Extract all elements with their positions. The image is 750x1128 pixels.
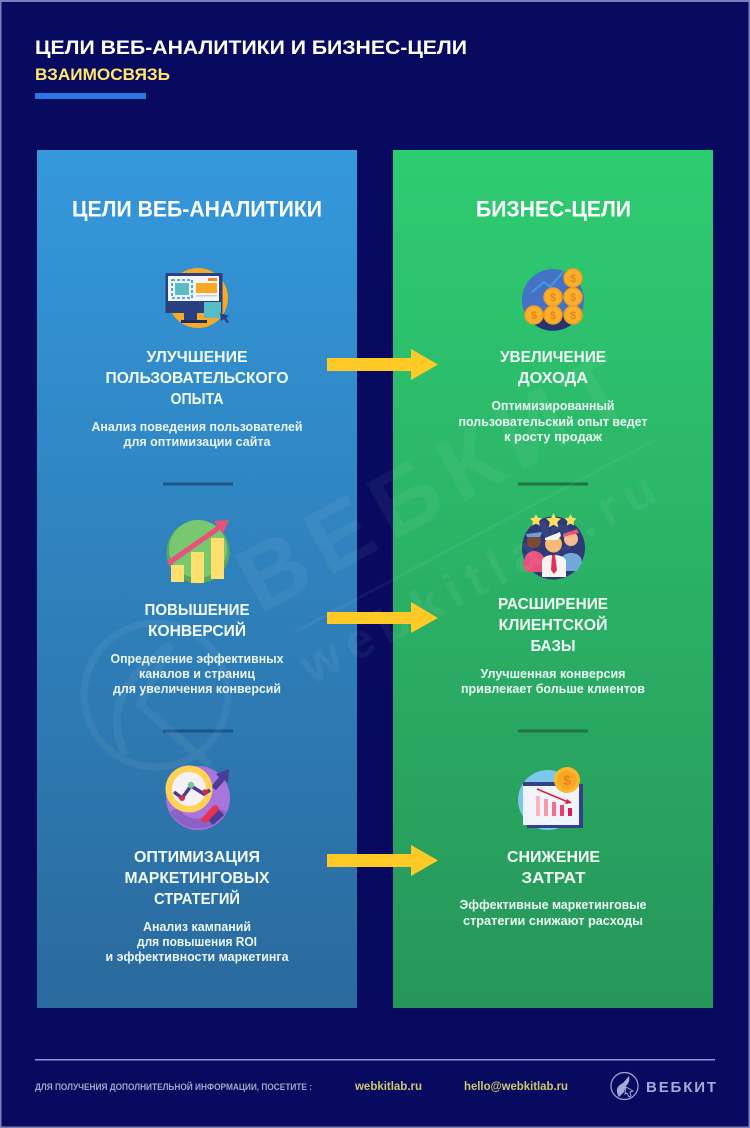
footer divider: [35, 1059, 715, 1060]
item description: customer base: привлекает больше клиентов: [461, 682, 645, 696]
heading: business goals: БИЗНЕС-ЦЕЛИ: [476, 196, 631, 222]
item description: cost reduction: стратегии снижают расходы: [463, 914, 643, 928]
item heading: revenue: ДОХОДА: [518, 370, 588, 387]
item description: revenue: [458, 399, 648, 444]
item description: marketing strategies: для повышения ROI: [137, 935, 257, 949]
item heading: user experience: УЛУЧШЕНИЕ: [146, 349, 248, 366]
item description: user experience: [92, 420, 302, 449]
icon: coins: $: [570, 273, 576, 285]
heading: web analytics goals: ЦЕЛИ ВЕБ-АНАЛИТИКИ: [72, 196, 322, 222]
item heading: conversions: КОНВЕРСИЙ: [148, 621, 246, 640]
item heading: customer base: БАЗЫ: [530, 638, 576, 655]
item description: marketing strategies: и эффективности маркетинга: [106, 950, 290, 964]
icon: coins: $: [550, 310, 556, 322]
icon: coins: $: [570, 292, 576, 304]
item heading: marketing strategies: МАРКЕТИНГОВЫХ: [124, 870, 270, 887]
watermark: ВЕБКИТ: [220, 335, 646, 632]
watermark: [84, 335, 665, 767]
icon: growth chart: [166, 520, 230, 584]
item description: conversions: каналов и страниц: [139, 667, 255, 681]
item description: revenue: Оптимизированный: [492, 399, 614, 413]
icon: coins: $: [550, 292, 556, 304]
panel: web analytics goals: [37, 150, 357, 1008]
item heading: user experience: ОПЫТА: [170, 391, 224, 408]
item heading: customer base: КЛИЕНТСКОЙ: [498, 615, 608, 634]
item description: conversions: для увеличения конверсий: [113, 682, 281, 696]
item description: revenue: к росту продаж: [504, 430, 602, 444]
footer note: ДЛЯ ПОЛУЧЕНИЯ ДОПОЛНИТЕЛЬНОЙ ИНФОРМАЦИИ, ПОСЕТИТЕ :: [35, 1081, 312, 1092]
item heading: marketing strategies: [124, 849, 270, 908]
panel: business goals: [393, 150, 713, 1008]
footer website: webkitlab.ru: [354, 1081, 422, 1093]
arrow: user experience to revenue: [327, 349, 438, 380]
icon: coins: [522, 269, 584, 331]
item heading: customer base: РАСШИРЕНИЕ: [498, 596, 608, 613]
item description: revenue: пользовательский опыт ведет: [458, 415, 648, 429]
item heading: conversions: ПОВЫШЕНИЕ: [144, 602, 250, 619]
item heading: marketing strategies: СТРАТЕГИЙ: [154, 889, 240, 908]
footer email: hello@webkitlab.ru: [464, 1081, 568, 1093]
watermark: webkitlab.ru: [290, 460, 665, 695]
item description: cost reduction: [460, 898, 647, 928]
icon: magnifier: [166, 766, 230, 830]
item heading: revenue: УВЕЛИЧЕНИЕ: [500, 349, 606, 366]
item description: user experience: для оптимизации сайта: [124, 435, 272, 449]
item description: user experience: Анализ поведения пользователей: [92, 420, 302, 434]
item description: marketing strategies: [106, 920, 290, 964]
title: ЦЕЛИ ВЕБ-АНАЛИТИКИ И БИЗНЕС-ЦЕЛИ: [35, 37, 467, 59]
subtitle: ВЗАИМОСВЯЗЬ: [35, 66, 170, 84]
item description: conversions: Определение эффективных: [110, 652, 284, 666]
footer logo: [611, 1072, 716, 1100]
item heading: conversions: [144, 602, 250, 640]
item description: cost reduction: Эффективные маркетинговые: [460, 898, 647, 912]
item heading: customer base: [498, 596, 608, 655]
item heading: cost reduction: [507, 849, 600, 887]
item heading: revenue: [500, 349, 606, 387]
item description: conversions: [110, 652, 284, 696]
footer logo: ВЕБКИТ: [646, 1079, 716, 1096]
title accent bar: [35, 93, 146, 99]
item heading: marketing strategies: ОПТИМИЗАЦИЯ: [134, 849, 260, 866]
item description: customer base: [461, 667, 645, 696]
icon: coins: $: [531, 310, 537, 322]
item heading: user experience: ПОЛЬЗОВАТЕЛЬСКОГО: [106, 370, 288, 387]
item heading: cost reduction: СНИЖЕНИЕ: [507, 849, 600, 866]
arrow: marketing strategies to cost reduction: [327, 845, 438, 876]
icon: monitor: [166, 268, 229, 328]
item description: customer base: Улучшенная конверсия: [480, 667, 626, 681]
item heading: user experience: [106, 349, 288, 408]
item heading: cost reduction: ЗАТРАТ: [522, 870, 586, 887]
icon: customers: [522, 513, 585, 580]
icon: cost reduction chart: $: [563, 772, 571, 788]
icon: cost reduction chart: [518, 767, 583, 830]
icon: coins: $: [570, 310, 576, 322]
item description: marketing strategies: Анализ кампаний: [143, 920, 251, 934]
arrow: conversions to customer base: [327, 602, 438, 633]
